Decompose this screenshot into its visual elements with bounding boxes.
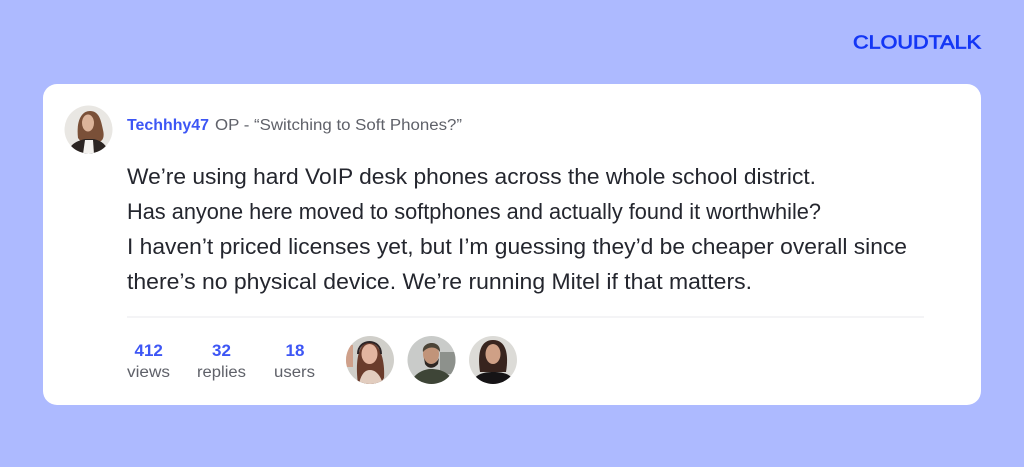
stat: views: 412 bbox=[134, 341, 163, 360]
avatar: participant 2 bbox=[407, 336, 456, 384]
stat: users: 18 bbox=[286, 341, 304, 360]
post body text: I haven’t priced licenses yet, but I’m guessing they’d be cheaper overall since bbox=[127, 234, 907, 259]
post body text bbox=[127, 164, 907, 294]
stat: replies: 32 bbox=[212, 341, 231, 360]
avatar: participant 1 bbox=[346, 336, 394, 384]
panel: forum post card bbox=[43, 84, 981, 405]
stat: replies bbox=[197, 341, 246, 381]
avatar: original poster bbox=[64, 105, 113, 154]
logo: CloudTalk: CLOUDTALK bbox=[853, 32, 982, 52]
post body text: We’re using hard VoIP desk phones across the whole school district. bbox=[127, 164, 816, 189]
heading: poster and thread title: OP - “Switching to Soft Phones?” bbox=[215, 117, 462, 134]
heading: poster and thread title: Techhhy47 bbox=[127, 117, 209, 134]
post body text: there’s no physical device. We’re running Mitel if that matters. bbox=[127, 269, 752, 294]
heading: poster and thread title bbox=[127, 117, 462, 134]
stat: replies: replies bbox=[197, 364, 246, 381]
stat: views: views bbox=[127, 364, 170, 381]
stat: views bbox=[127, 341, 170, 381]
post body text: Has anyone here moved to softphones and actually found it worthwhile? bbox=[127, 199, 821, 224]
avatar: participant 3 bbox=[469, 336, 517, 384]
stat: users bbox=[274, 341, 315, 381]
stat: users: users bbox=[274, 364, 315, 381]
